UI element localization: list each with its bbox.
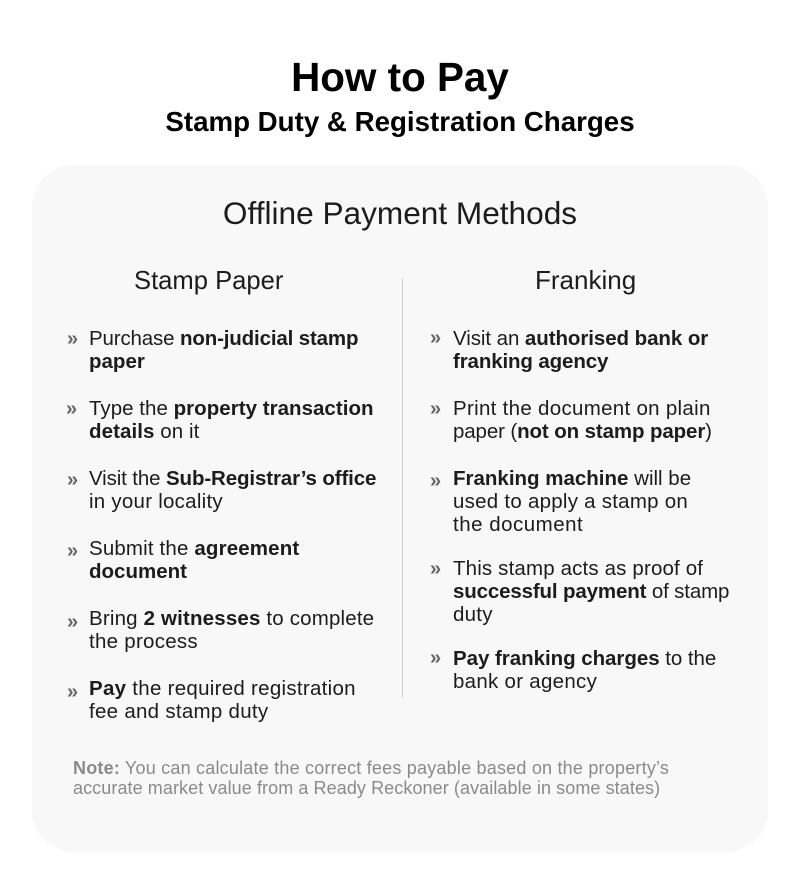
list: franking steps: Visit an authorised bank or bbox=[453, 327, 708, 350]
title: How to Pay bbox=[291, 54, 509, 100]
list: stamp paper steps: in your locality bbox=[89, 490, 223, 513]
list: franking steps: successful payment of stamp bbox=[453, 580, 729, 603]
list: franking steps: » bbox=[430, 327, 441, 349]
list: franking steps: Franking machine will be bbox=[453, 467, 691, 490]
list: franking steps: bank or agency bbox=[453, 670, 597, 693]
list: franking steps: paper (not on stamp paper) bbox=[453, 420, 712, 443]
column heading: stamp paper: Stamp Paper bbox=[134, 267, 283, 295]
column divider bbox=[402, 278, 403, 698]
list: stamp paper steps: » bbox=[67, 469, 78, 491]
note: Note: You can calculate the correct fees payable based on the property’s bbox=[73, 758, 669, 778]
list: stamp paper steps: Submit the agreement bbox=[89, 537, 299, 560]
list: stamp paper steps bbox=[66, 327, 376, 723]
list: franking steps: duty bbox=[453, 603, 493, 626]
list: franking steps: » bbox=[430, 647, 441, 669]
list: stamp paper steps: Purchase non-judicial stamp bbox=[89, 327, 358, 350]
list: stamp paper steps: » bbox=[66, 398, 77, 420]
list: franking steps: » bbox=[430, 398, 441, 420]
list: stamp paper steps: Bring 2 witnesses to complete bbox=[89, 607, 374, 630]
list: stamp paper steps: » bbox=[67, 540, 78, 562]
note bbox=[73, 758, 669, 798]
list: stamp paper steps: the process bbox=[89, 630, 198, 653]
list: franking steps: » bbox=[430, 470, 441, 492]
column heading: franking: Franking bbox=[535, 265, 636, 295]
list: stamp paper steps: » bbox=[67, 681, 78, 703]
list: stamp paper steps: fee and stamp duty bbox=[89, 700, 268, 723]
list: stamp paper steps: Type the property transaction bbox=[89, 397, 374, 420]
list: franking steps: » bbox=[430, 558, 441, 580]
list: stamp paper steps: document bbox=[89, 560, 187, 583]
list: stamp paper steps: Pay the required registration bbox=[89, 677, 356, 700]
list: stamp paper steps: paper bbox=[89, 350, 145, 373]
panel: offline payment methods bbox=[32, 165, 768, 852]
list: stamp paper steps: Visit the Sub-Registrar’s office bbox=[89, 467, 376, 490]
list: franking steps: Pay franking charges to the bbox=[453, 647, 716, 670]
list: franking steps: used to apply a stamp on bbox=[453, 490, 688, 513]
panel heading: Offline Payment Methods bbox=[223, 195, 577, 231]
list: franking steps: franking agency bbox=[453, 350, 608, 373]
list: franking steps: Print the document on plain bbox=[453, 397, 711, 420]
list: franking steps: the document bbox=[453, 513, 583, 536]
list: stamp paper steps: » bbox=[67, 611, 78, 633]
list: franking steps: This stamp acts as proof of bbox=[453, 557, 703, 580]
list: stamp paper steps: details on it bbox=[89, 420, 199, 443]
list: franking steps bbox=[430, 327, 729, 693]
list: stamp paper steps: » bbox=[67, 328, 78, 350]
subtitle: Stamp Duty & Registration Charges bbox=[165, 106, 635, 137]
note: accurate market value from a Ready Reckoner (available in some states) bbox=[73, 778, 660, 798]
